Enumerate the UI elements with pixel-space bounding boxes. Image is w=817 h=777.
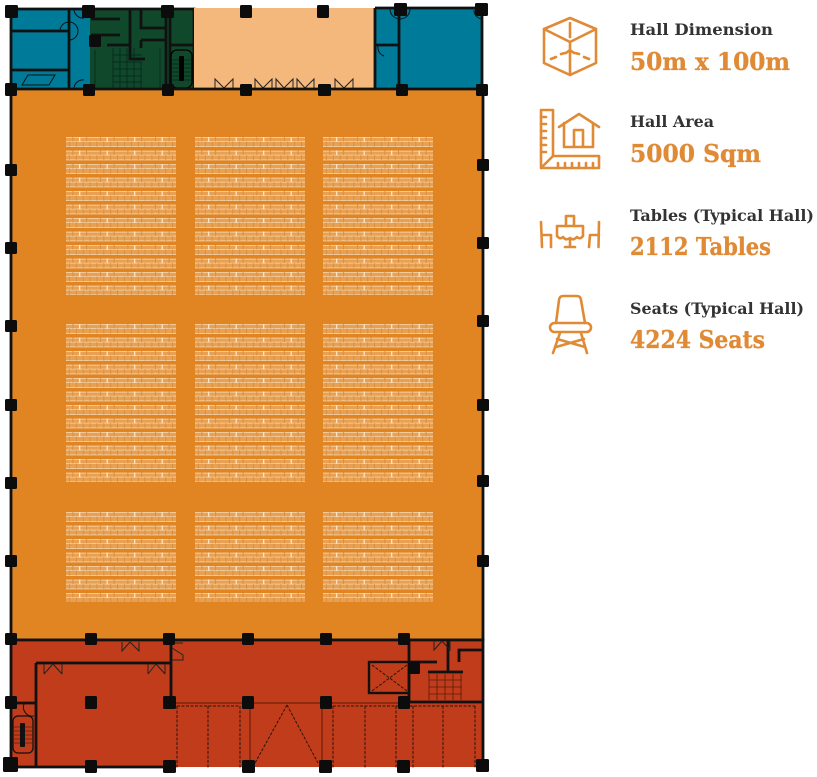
room: top right teal rooms bbox=[374, 8, 482, 89]
main orange hall bbox=[11, 89, 483, 640]
room: top left teal rooms bbox=[11, 9, 90, 89]
label: Hall Area bbox=[630, 112, 714, 131]
icon: chair bbox=[550, 296, 591, 353]
room: green service core bbox=[90, 9, 194, 89]
structural columns bbox=[3, 3, 489, 773]
value: 4224 Seats bbox=[630, 325, 765, 354]
label: Hall Dimension bbox=[630, 20, 773, 39]
floor plan bbox=[3, 3, 489, 773]
value: 2112 Tables bbox=[630, 232, 771, 261]
icon: table with chairs bbox=[541, 216, 599, 247]
label: Tables (Typical Hall) bbox=[630, 206, 814, 225]
value: 5000 Sqm bbox=[630, 139, 761, 168]
seating blocks bbox=[66, 137, 433, 602]
stat: tables bbox=[541, 206, 814, 261]
doors: lobby entrances bbox=[215, 79, 353, 88]
stat: hall dimension bbox=[544, 18, 790, 76]
icon: cube bbox=[544, 18, 596, 75]
stat: hall area bbox=[541, 110, 761, 168]
value: 50m x 100m bbox=[630, 47, 790, 76]
room: peach lobby bbox=[194, 8, 374, 89]
label: Seats (Typical Hall) bbox=[630, 299, 804, 318]
icon: house on ruler bbox=[541, 110, 599, 168]
seating block row 1 bbox=[66, 137, 433, 295]
seating block row 2 bbox=[66, 324, 433, 482]
room: red service area bbox=[11, 640, 483, 768]
stat: seats bbox=[550, 296, 804, 354]
seating block row 3 bbox=[66, 512, 433, 602]
